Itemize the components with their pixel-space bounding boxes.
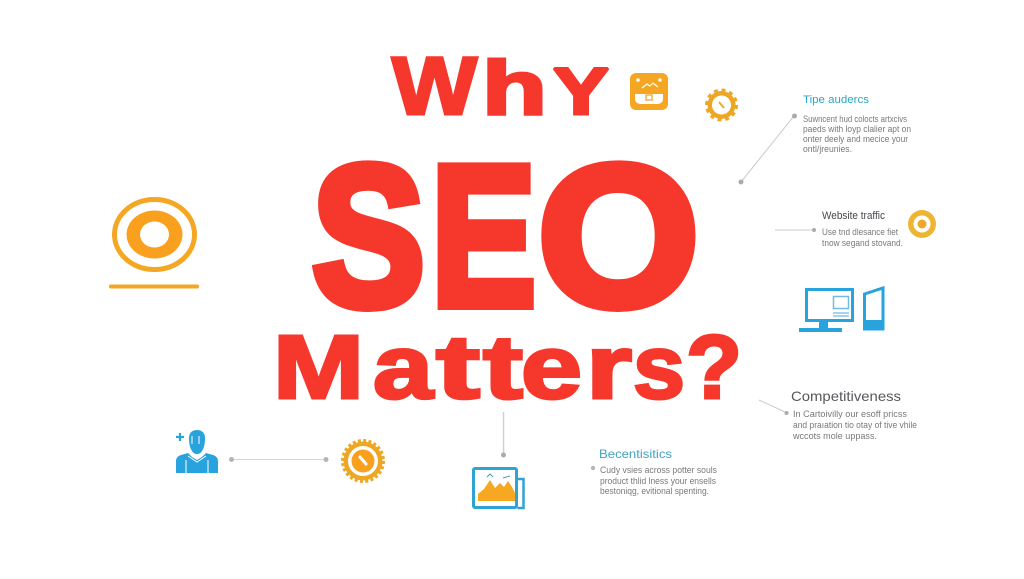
body text: and praıation tio otay of tive vhile <box>793 420 917 430</box>
connector <box>775 228 816 232</box>
body text: onter deely and mecice your <box>803 134 908 144</box>
icon: yellow badge <box>908 210 936 238</box>
title line: Matters?: t <box>483 318 523 418</box>
body text: Cudy vsies across potter souls <box>600 465 717 475</box>
title line: SEO: E <box>431 125 536 348</box>
panel: becentisitics <box>501 412 717 496</box>
title line: Matters?: ? <box>686 318 742 418</box>
title line: Matters?: r <box>586 318 632 418</box>
connector: person to badge <box>229 457 328 462</box>
connector <box>738 114 797 184</box>
title line: Matters?: e <box>521 318 582 418</box>
panel: target audience <box>738 94 911 184</box>
icon: orange photo card <box>630 73 668 110</box>
icon: picture frame <box>474 468 524 508</box>
panel: website traffic <box>775 210 903 248</box>
title line: Why: Y <box>553 54 609 128</box>
title line: Matters?: M <box>273 318 364 418</box>
body text: tnow segand stovand. <box>822 238 903 248</box>
heading: Competitiveness <box>791 388 901 404</box>
title line: SEO: O <box>538 125 699 348</box>
heading: Tipe audercs <box>803 94 870 106</box>
body text <box>792 409 917 441</box>
icon: orange gear <box>706 90 736 120</box>
heading: Becentisitics <box>599 447 672 461</box>
title line: Matters?: s <box>633 318 685 418</box>
body text <box>803 114 911 154</box>
icon: monitor and tablet <box>799 288 884 330</box>
title line: SEO: S <box>312 125 425 348</box>
icon: orange target <box>111 200 197 286</box>
icon: person <box>176 430 218 473</box>
connector <box>501 412 595 470</box>
title line: Matters?: t <box>436 318 480 418</box>
body text: bestoniqg, evitional spenting. <box>600 486 709 496</box>
title line: Matters?: a <box>373 318 434 418</box>
body text: product thlid lness your ensells <box>600 476 716 486</box>
title <box>273 41 742 418</box>
title line: Why: W <box>392 41 478 132</box>
heading: Website traffic <box>822 210 885 222</box>
body text: ontl/jreunies. <box>803 144 852 154</box>
body text: paeds with loyp clalier apt on <box>803 124 911 134</box>
body text: Use tnd dlesance fiet <box>822 227 898 237</box>
connector <box>759 400 788 415</box>
body text: Suwncent hud colocts artxcivs <box>803 114 907 124</box>
body text: In Cartoivilly our esoff pricss <box>793 409 908 419</box>
body text: wccots mole uppass. <box>792 431 877 441</box>
icon: orange seal badge <box>342 440 384 482</box>
panel: competitiveness <box>759 388 917 441</box>
title line: Why: h <box>482 46 547 131</box>
body text <box>600 465 717 496</box>
body text <box>822 227 903 248</box>
